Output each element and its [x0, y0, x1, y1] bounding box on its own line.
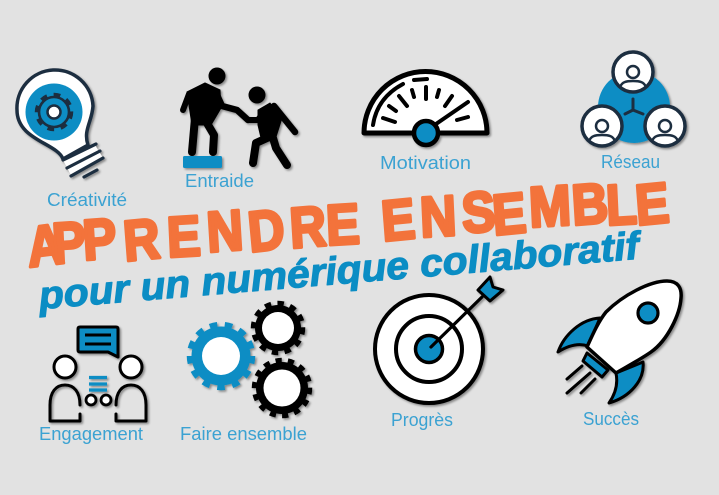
gear: blue: [191, 326, 251, 386]
label: Progrès: Progrès: [391, 410, 453, 430]
label: Créativité: Créativité: [47, 190, 127, 210]
subtitle: pour un numérique collaboratif: [36, 224, 645, 318]
label: Entraide: Entraide: [185, 171, 254, 191]
label: Motivation: Motivation: [380, 153, 471, 173]
icon: two people helping: [183, 68, 295, 168]
gear: black top: [254, 304, 302, 352]
icon: motivation gauge: [364, 71, 487, 145]
label: Faire ensemble: Faire ensemble: [180, 424, 307, 444]
icon: engagement, two people talking: [50, 327, 146, 421]
icon: rocket: [558, 281, 681, 403]
label: Engagement: Engagement: [39, 424, 143, 444]
icon: target with arrow: [375, 277, 503, 403]
gear: black bottom: [255, 361, 309, 415]
icon: network of people: [582, 52, 685, 146]
icon: three gears: [191, 304, 309, 415]
label: Succès: Succès: [583, 409, 639, 429]
label: Réseau: Réseau: [601, 152, 660, 172]
title: APPRENDRE ENSEMBLE: [24, 171, 671, 280]
icon: light bulb with gear: [17, 70, 103, 177]
